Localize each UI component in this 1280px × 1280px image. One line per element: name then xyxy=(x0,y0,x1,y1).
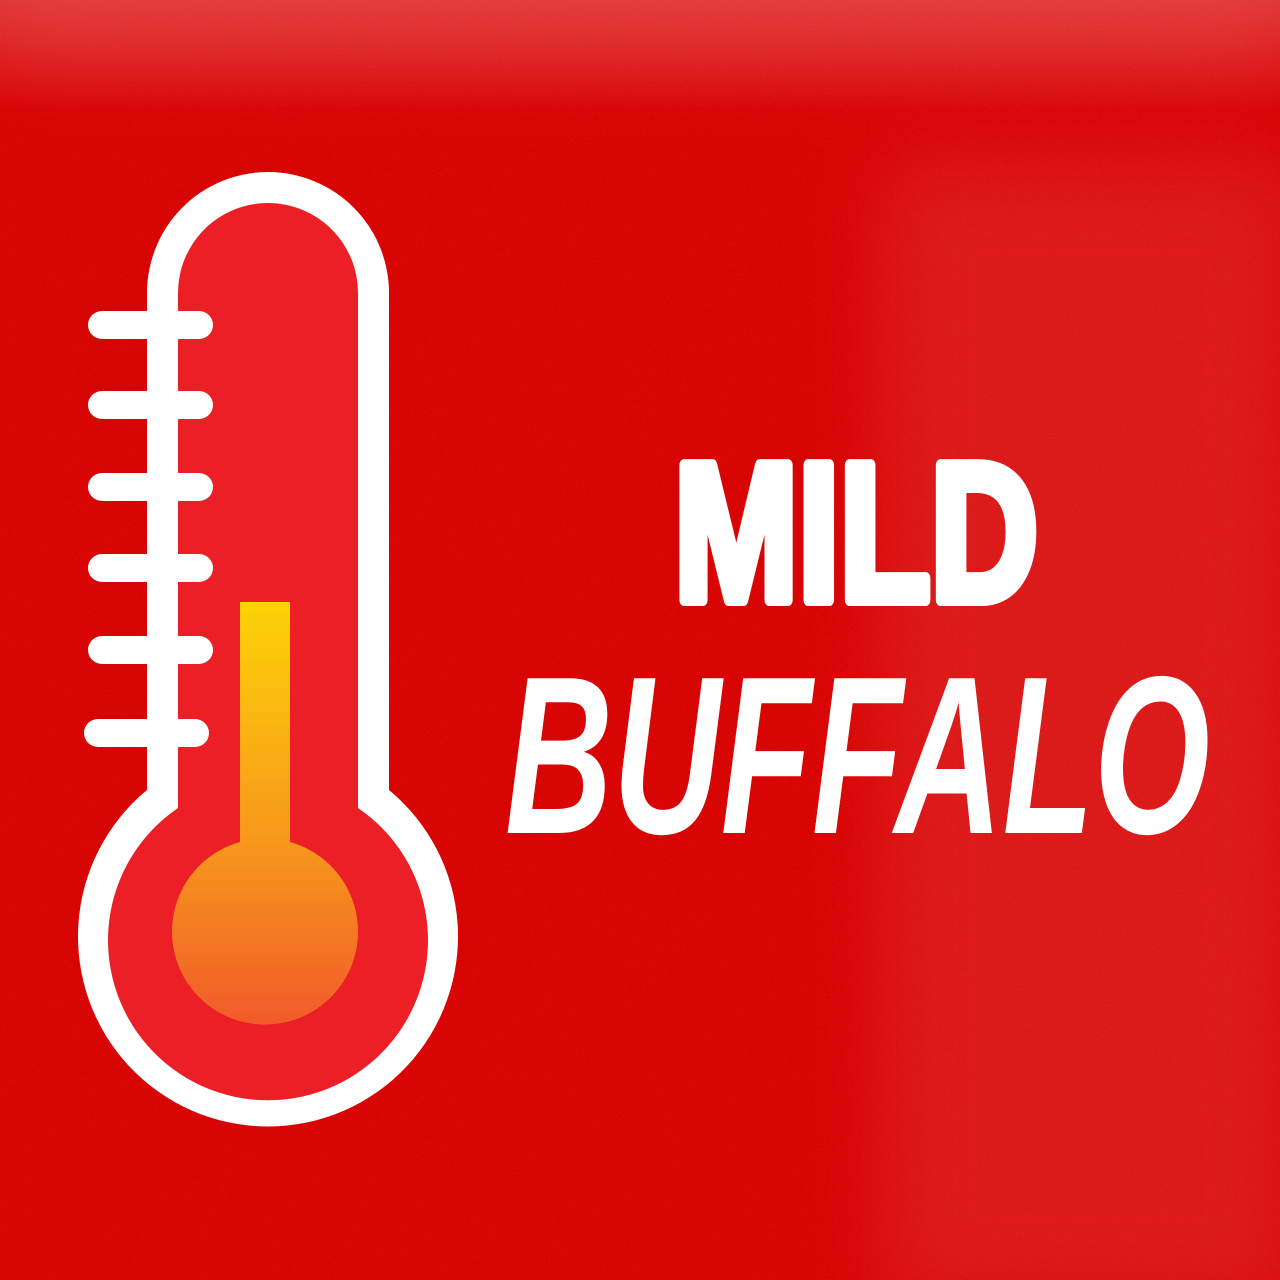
thermometer outline xyxy=(78,172,458,1126)
mercury xyxy=(172,602,358,1025)
tick marks xyxy=(84,311,213,747)
heading: MILD: MILD xyxy=(674,423,1038,642)
thermometer inner xyxy=(108,203,428,1100)
